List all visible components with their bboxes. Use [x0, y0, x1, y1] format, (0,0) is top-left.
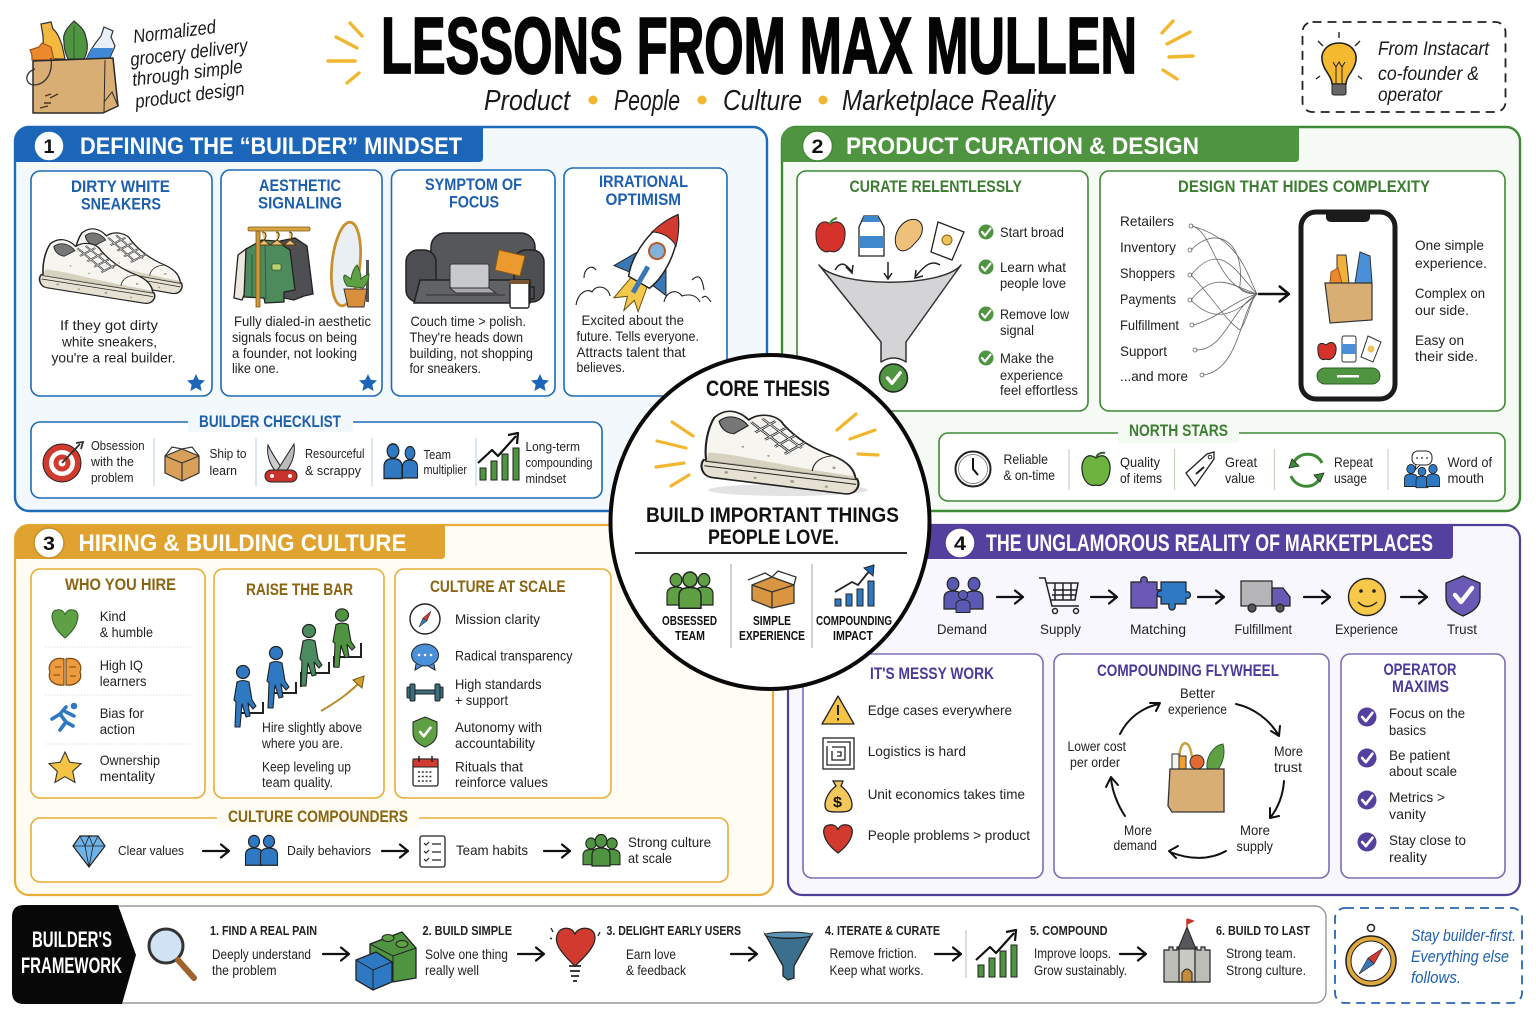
card: design that hides complexity: Complex on [1415, 285, 1485, 301]
card: symptom of focus: SYMPTOM OF [425, 176, 522, 194]
step 4: iterate and curate: Keep what works. [830, 962, 924, 978]
icon: team of three [583, 834, 620, 866]
icon: calendar [413, 756, 438, 786]
card: it's messy work: People problems > product [868, 827, 1030, 843]
icon: money bag: $ [833, 794, 843, 811]
core pillar: obsessed team [662, 572, 717, 643]
card: aesthetic signaling: a founder, not looking [232, 345, 357, 361]
card: operator maxims: Be patient [1389, 747, 1450, 763]
builder checklist strip: with the [90, 454, 134, 469]
panel 2 heading: PRODUCT CURATION & DESIGN [846, 133, 1199, 160]
checklist: curate steps: Learn what [1000, 259, 1066, 275]
divider and step 5: compound [966, 924, 1146, 978]
step 4: iterate and curate: Remove friction. [830, 945, 917, 961]
card: compounding flywheel: experience [1168, 701, 1227, 717]
core thesis circle: CORE THESIS [706, 376, 830, 401]
step 1: find a real pain: Deeply understand [212, 946, 311, 962]
builder checklist strip: multiplier [424, 462, 468, 477]
step 1: find a real pain: the problem [212, 962, 276, 978]
flow: demand to trust: Trust [1447, 621, 1477, 637]
card: culture at scale: Rituals that [455, 758, 523, 774]
card: design that hides complexity: Easy on [1415, 332, 1464, 348]
card: aesthetic signaling: signals focus on being [232, 329, 357, 345]
card: design that hides complexity: DESIGN THAT HIDES COMPLEXITY [1178, 178, 1430, 196]
card: irrational optimism: Excited about the [582, 312, 684, 328]
card: design that hides complexity: Support [1120, 343, 1167, 359]
panel 4 heading [880, 525, 1453, 559]
header: origin callout: From Instacart [1378, 39, 1490, 60]
subtitle: Product [484, 85, 572, 117]
header: grocery bag icon [27, 21, 118, 113]
builder checklist strip: compounding [526, 455, 592, 470]
icon: phone app [1301, 212, 1395, 399]
culture compounders strip: Clear values [118, 843, 184, 858]
culture compounders strip: Team habits [456, 842, 528, 858]
card: culture at scale: accountability [455, 735, 535, 751]
card: compounding flywheel: Lower cost [1068, 738, 1126, 754]
card: design that hides complexity: Shoppers [1120, 265, 1175, 281]
card: design that hides complexity [1100, 171, 1505, 411]
icon: climbing figures [234, 609, 364, 727]
core thesis circle: PEOPLE LOVE. [708, 526, 839, 549]
step 1: find a real pain [149, 924, 349, 978]
card: culture at scale: Mission clarity [455, 611, 540, 627]
north stars strip: Reliable [1004, 451, 1048, 467]
card: curate relentlessly: CURATE RELENTLESSLY [850, 178, 1022, 196]
card: culture at scale [395, 569, 611, 798]
panel 3 heading: HIRING & BUILDING CULTURE [78, 530, 406, 557]
north stars strip: of items [1120, 470, 1162, 486]
step 3: delight early users [550, 924, 757, 981]
north stars strip: usage [1334, 470, 1367, 486]
panel 1 heading: DEFINING THE “BUILDER” MINDSET [80, 133, 462, 160]
builder checklist strip: & scrappy [305, 463, 361, 478]
icon: clock [956, 452, 990, 486]
closing callout: stay builder-first: follows. [1411, 968, 1461, 987]
card: culture at scale: Autonomy with [455, 719, 542, 735]
step 6: build to last: 6. BUILD TO LAST [1216, 924, 1310, 938]
panel 3 heading [15, 525, 445, 559]
icon: green apple [1082, 453, 1110, 485]
card: compounding flywheel: per order [1070, 754, 1120, 770]
icon: demand [944, 578, 983, 612]
builder checklist strip: Obsession [91, 438, 144, 453]
card: design that hides complexity: their side. [1415, 348, 1478, 364]
card: design that hides complexity: our side. [1415, 302, 1469, 318]
card: who you hire: High IQ [100, 657, 143, 673]
step 3: delight early users: Earn love [626, 946, 676, 962]
card: symptom of focus: building, not shopping [410, 345, 533, 361]
subtitle: People [614, 85, 680, 117]
culture compounders strip: CULTURE COMPOUNDERS [228, 808, 408, 826]
card: irrational optimism: future. Tells everyone. [576, 328, 699, 344]
card: operator maxims: about scale [1389, 763, 1457, 779]
card: culture at scale: CULTURE AT SCALE [430, 578, 566, 596]
icon: truck [1241, 581, 1290, 612]
north stars strip: mouth [1448, 470, 1484, 486]
icon: runner [52, 703, 77, 730]
card: raise the bar: Keep leveling up [262, 758, 351, 774]
header: tagline: product design [133, 79, 246, 113]
framework label: BUILDER'S [32, 927, 112, 952]
step 4: iterate and curate [765, 924, 961, 980]
header: tagline: Normalized [132, 17, 218, 48]
icon: warning [822, 696, 854, 724]
card: compounding flywheel: More [1274, 743, 1303, 759]
icon: word of mouth [1404, 451, 1440, 488]
icon: money bag [825, 781, 852, 812]
icon: hero sneaker with rays [656, 408, 878, 496]
header: origin callout: co-founder & [1378, 64, 1479, 85]
checklist: curate steps: Remove low [1000, 306, 1070, 322]
core pillar: compounding impact: COMPOUNDING [816, 614, 892, 628]
icon: flywheel grocery bag [1168, 743, 1224, 812]
north stars strip: Repeat [1334, 454, 1373, 470]
panel 2: product curation and design [782, 127, 1520, 511]
flow: demand to trust: Supply [1040, 621, 1081, 637]
card: symptom of focus: They're heads down [410, 329, 523, 345]
card: operator maxims: basics [1389, 722, 1426, 738]
diagram: converging lines [1188, 224, 1257, 377]
card: it's messy work: Logistics is hard [868, 743, 966, 759]
icon: compass [410, 604, 440, 634]
framework label [12, 905, 136, 1004]
builder checklist strip: Ship to [210, 446, 246, 461]
card: operator maxims: reality [1389, 849, 1427, 865]
subtitle: Marketplace Reality [842, 85, 1056, 117]
panel 1 heading: 1 [44, 137, 55, 158]
step 6: build to last: Strong team. [1226, 945, 1296, 961]
step 2: build simple: Solve one thing [425, 946, 508, 962]
card: who you hire: learners [100, 673, 146, 689]
icon: price tag [1186, 452, 1214, 486]
builder checklist strip: BUILDER CHECKLIST [199, 413, 341, 431]
icon: gold compass [1346, 924, 1396, 986]
title with rays [328, 1, 1193, 90]
icon: puzzle [1131, 577, 1190, 610]
core thesis circle [610, 355, 930, 689]
card: design that hides complexity: Payments [1120, 291, 1176, 307]
panel 1: defining the builder mindset [15, 127, 767, 511]
card: it's messy work [803, 654, 1043, 878]
card: culture at scale: + support [455, 692, 508, 708]
card: compounding flywheel: Better [1180, 685, 1215, 701]
card: design that hides complexity: Fulfillment [1120, 317, 1179, 333]
card: irrational optimism: OPTIMISM [606, 191, 681, 209]
card: symptom of focus: Couch time > polish. [410, 313, 526, 329]
step 2: build simple: really well [425, 962, 479, 978]
core thesis circle: BUILD IMPORTANT THINGS [646, 504, 899, 527]
icon: open box [165, 447, 199, 481]
checklist: curate steps: people love [1000, 275, 1066, 291]
step 3: delight early users: & feedback [626, 962, 687, 978]
card: compounding flywheel: supply [1236, 838, 1273, 854]
card: irrational optimism [564, 168, 727, 396]
card: aesthetic signaling: SIGNALING [258, 194, 342, 212]
icon: team [384, 444, 418, 478]
arrow: to phone [1259, 287, 1289, 301]
culture compounders strip [31, 808, 728, 882]
card: compounding flywheel: More [1124, 822, 1152, 838]
culture compounders strip: Strong culture [628, 834, 711, 850]
core pillar: simple experience: EXPERIENCE [739, 629, 805, 643]
card: who you hire: Kind [100, 608, 126, 624]
step 6: build to last [1164, 919, 1310, 982]
card: culture at scale: reinforce values [455, 774, 548, 790]
icon: repeat arrows [1289, 454, 1324, 486]
header: origin callout [1302, 22, 1506, 112]
card: who you hire: action [100, 721, 135, 737]
card: operator maxims [1341, 654, 1505, 878]
card: irrational optimism: believes. [576, 359, 625, 375]
builder checklist strip: Long-term [526, 439, 580, 454]
card: who you hire [31, 569, 205, 798]
icon: clipboard [420, 836, 445, 867]
card: operator maxims: vanity [1389, 806, 1426, 822]
checklist: curate steps: Start broad [1000, 224, 1064, 240]
icon: sofa with laptop [406, 233, 544, 308]
core pillar: obsessed team: OBSESSED [662, 614, 717, 628]
step 6: build to last: Strong culture. [1226, 962, 1306, 978]
panel 1 heading [15, 127, 483, 162]
icon: brain [49, 658, 81, 685]
builder checklist strip: learn [210, 463, 237, 478]
step 2: build simple [356, 924, 544, 990]
checklist: curate steps: Make the [1000, 350, 1054, 366]
panel 4: unglamorous reality of marketplaces [788, 525, 1520, 895]
builder's framework bar [12, 905, 1326, 1004]
card: dirty white sneakers: DIRTY WHITE [71, 178, 170, 196]
card: design that hides complexity: One simple [1415, 237, 1484, 253]
core pillar: compounding impact: IMPACT [833, 629, 873, 643]
divider and step 5: compound: Improve loops. [1034, 945, 1111, 961]
icon: star [49, 752, 81, 782]
icon: rocket [576, 200, 711, 325]
icon: target [43, 442, 83, 482]
step 4: iterate and curate: 4. ITERATE & CURATE [825, 924, 940, 938]
card: raise the bar: RAISE THE BAR [246, 581, 353, 599]
icon: maze [823, 738, 854, 769]
flow: demand to trust: Demand [937, 621, 987, 637]
subtitle: Culture [723, 85, 802, 117]
panel 3: hiring and building culture [15, 525, 773, 895]
core pillar: simple experience: SIMPLE [753, 614, 791, 628]
card: culture at scale: High standards [455, 676, 542, 692]
card: compounding flywheel: More [1240, 822, 1270, 838]
card: raise the bar: Hire slightly above [262, 719, 362, 735]
icon: two people [246, 835, 278, 865]
framework label: FRAMEWORK [21, 953, 122, 978]
card: aesthetic signaling: Fully dialed-in aesthetic [234, 313, 371, 329]
card: design that hides complexity: Retailers [1120, 213, 1174, 229]
icon: multitool [265, 444, 297, 482]
card: operator maxims: Stay close to [1389, 832, 1466, 848]
divider and step 5: compound: Grow sustainably. [1034, 962, 1127, 978]
card: dirty white sneakers: white sneakers, [61, 334, 157, 350]
north stars strip: Quality [1120, 454, 1160, 470]
card: irrational optimism: IRRATIONAL [599, 173, 688, 191]
card: who you hire: & humble [100, 624, 153, 640]
flow: demand to trust: Experience [1335, 621, 1398, 637]
subtitle [484, 85, 1056, 117]
card: who you hire: Ownership [100, 752, 160, 768]
arrows: flywheel loop [1106, 703, 1284, 858]
icon: smiley [1348, 578, 1386, 616]
divider and step 5: compound: 5. COMPOUND [1030, 924, 1108, 938]
checklist: curate steps: experience [1000, 367, 1063, 383]
header: origin callout: operator [1378, 85, 1443, 106]
panel 4 heading: 4 [954, 534, 966, 555]
flow: demand to trust: Fulfillment [1234, 621, 1292, 637]
closing callout: stay builder-first: Stay builder-first. [1411, 926, 1516, 945]
panel 2 heading: 2 [812, 137, 824, 158]
panel 2 heading [782, 127, 1299, 162]
card: symptom of focus: FOCUS [449, 194, 499, 212]
closing callout: stay builder-first [1335, 908, 1522, 1003]
icon: growth chart [478, 433, 519, 480]
north stars strip: & on-time [1004, 467, 1055, 483]
card: aesthetic signaling: AESTHETIC [259, 177, 341, 195]
card: operator maxims: MAXIMS [1392, 678, 1449, 696]
header: tagline: grocery delivery [129, 36, 250, 71]
card: who you hire: mentality [100, 768, 155, 784]
card: compounding flywheel: demand [1114, 837, 1157, 853]
culture compounders strip: Daily behaviors [287, 843, 371, 858]
icon: trust shield [1446, 576, 1480, 616]
icon: clothes rack and mirror [234, 221, 369, 307]
flow: demand to trust: Matching [1130, 621, 1186, 637]
card: design that hides complexity: experience. [1415, 255, 1487, 271]
icon: cart [1039, 578, 1079, 614]
core pillar: compounding impact [816, 565, 892, 643]
card: who you hire: Bias for [100, 705, 144, 721]
card: design that hides complexity: ...and more [1120, 368, 1188, 384]
icon: red heart [824, 825, 852, 853]
north stars strip [939, 422, 1505, 501]
card: operator maxims: Metrics > [1389, 789, 1445, 805]
card: compounding flywheel: COMPOUNDING FLYWHEEL [1097, 662, 1279, 680]
step 2: build simple: 2. BUILD SIMPLE [422, 924, 512, 938]
card: it's messy work: IT'S MESSY WORK [870, 665, 994, 683]
card: it's messy work: Edge cases everywhere [868, 702, 1012, 718]
card: symptom of focus: for sneakers. [410, 360, 481, 376]
icon: dumbbell [407, 684, 443, 701]
checklist: curate steps: signal [1000, 322, 1034, 338]
core pillar: simple experience [739, 571, 805, 643]
builder checklist strip: Resourceful [305, 446, 365, 461]
card: operator maxims: Focus on the [1389, 705, 1465, 721]
north stars strip: value [1225, 470, 1255, 486]
builder checklist strip [31, 412, 602, 498]
card: raise the bar: team quality. [262, 774, 333, 790]
card: raise the bar: where you are. [261, 735, 343, 751]
culture compounders strip: at scale [628, 850, 672, 866]
card: operator maxims: OPERATOR [1384, 661, 1457, 679]
card: culture at scale: Radical transparency [455, 648, 572, 664]
card: design that hides complexity: Inventory [1120, 239, 1176, 255]
builder checklist strip: mindset [526, 471, 566, 486]
card: it's messy work: Unit economics takes time [868, 786, 1025, 802]
builder checklist strip: Team [424, 447, 451, 462]
header: tagline [129, 17, 250, 113]
card: who you hire: WHO YOU HIRE [65, 576, 176, 594]
card: compounding flywheel [1054, 654, 1329, 878]
card: irrational optimism: Attracts talent that [576, 344, 686, 360]
icon: shield check [413, 717, 437, 747]
builder checklist strip: problem [91, 470, 134, 485]
card: raise the bar [214, 569, 384, 798]
north stars strip: NORTH STARS [1129, 422, 1228, 440]
card: curate relentlessly [797, 171, 1088, 411]
icon: chat bubble [412, 644, 438, 670]
icon: dirty sneakers [38, 226, 189, 305]
header: tagline: through simple [131, 57, 244, 91]
step 3: delight early users: 3. DELIGHT EARLY USERS [606, 924, 741, 938]
card: dirty white sneakers: If they got dirty [60, 317, 158, 333]
step 1: find a real pain: 1. FIND A REAL PAIN [210, 924, 317, 938]
card: aesthetic signaling: like one. [232, 360, 279, 376]
card: dirty white sneakers [31, 171, 212, 396]
card: aesthetic signaling [221, 170, 382, 396]
icon: green heart [52, 610, 78, 638]
checklist: curate steps: feel effortless [1000, 382, 1078, 398]
card: compounding flywheel: trust [1274, 759, 1302, 775]
icon: groceries entering funnel [816, 216, 964, 392]
card: symptom of focus [392, 170, 555, 396]
flow: demand to trust [937, 576, 1480, 637]
north stars strip: Word of [1448, 454, 1492, 470]
card: dirty white sneakers: you're a real builder. [52, 350, 176, 366]
icon: diamond [73, 836, 105, 867]
closing callout: stay builder-first: Everything else [1411, 947, 1509, 966]
card: dirty white sneakers: SNEAKERS [81, 196, 161, 214]
panel 3 heading: 3 [43, 534, 55, 555]
checklist: curate steps [978, 224, 1078, 398]
core pillar: obsessed team: TEAM [675, 629, 705, 643]
north stars strip: Great [1225, 454, 1257, 470]
